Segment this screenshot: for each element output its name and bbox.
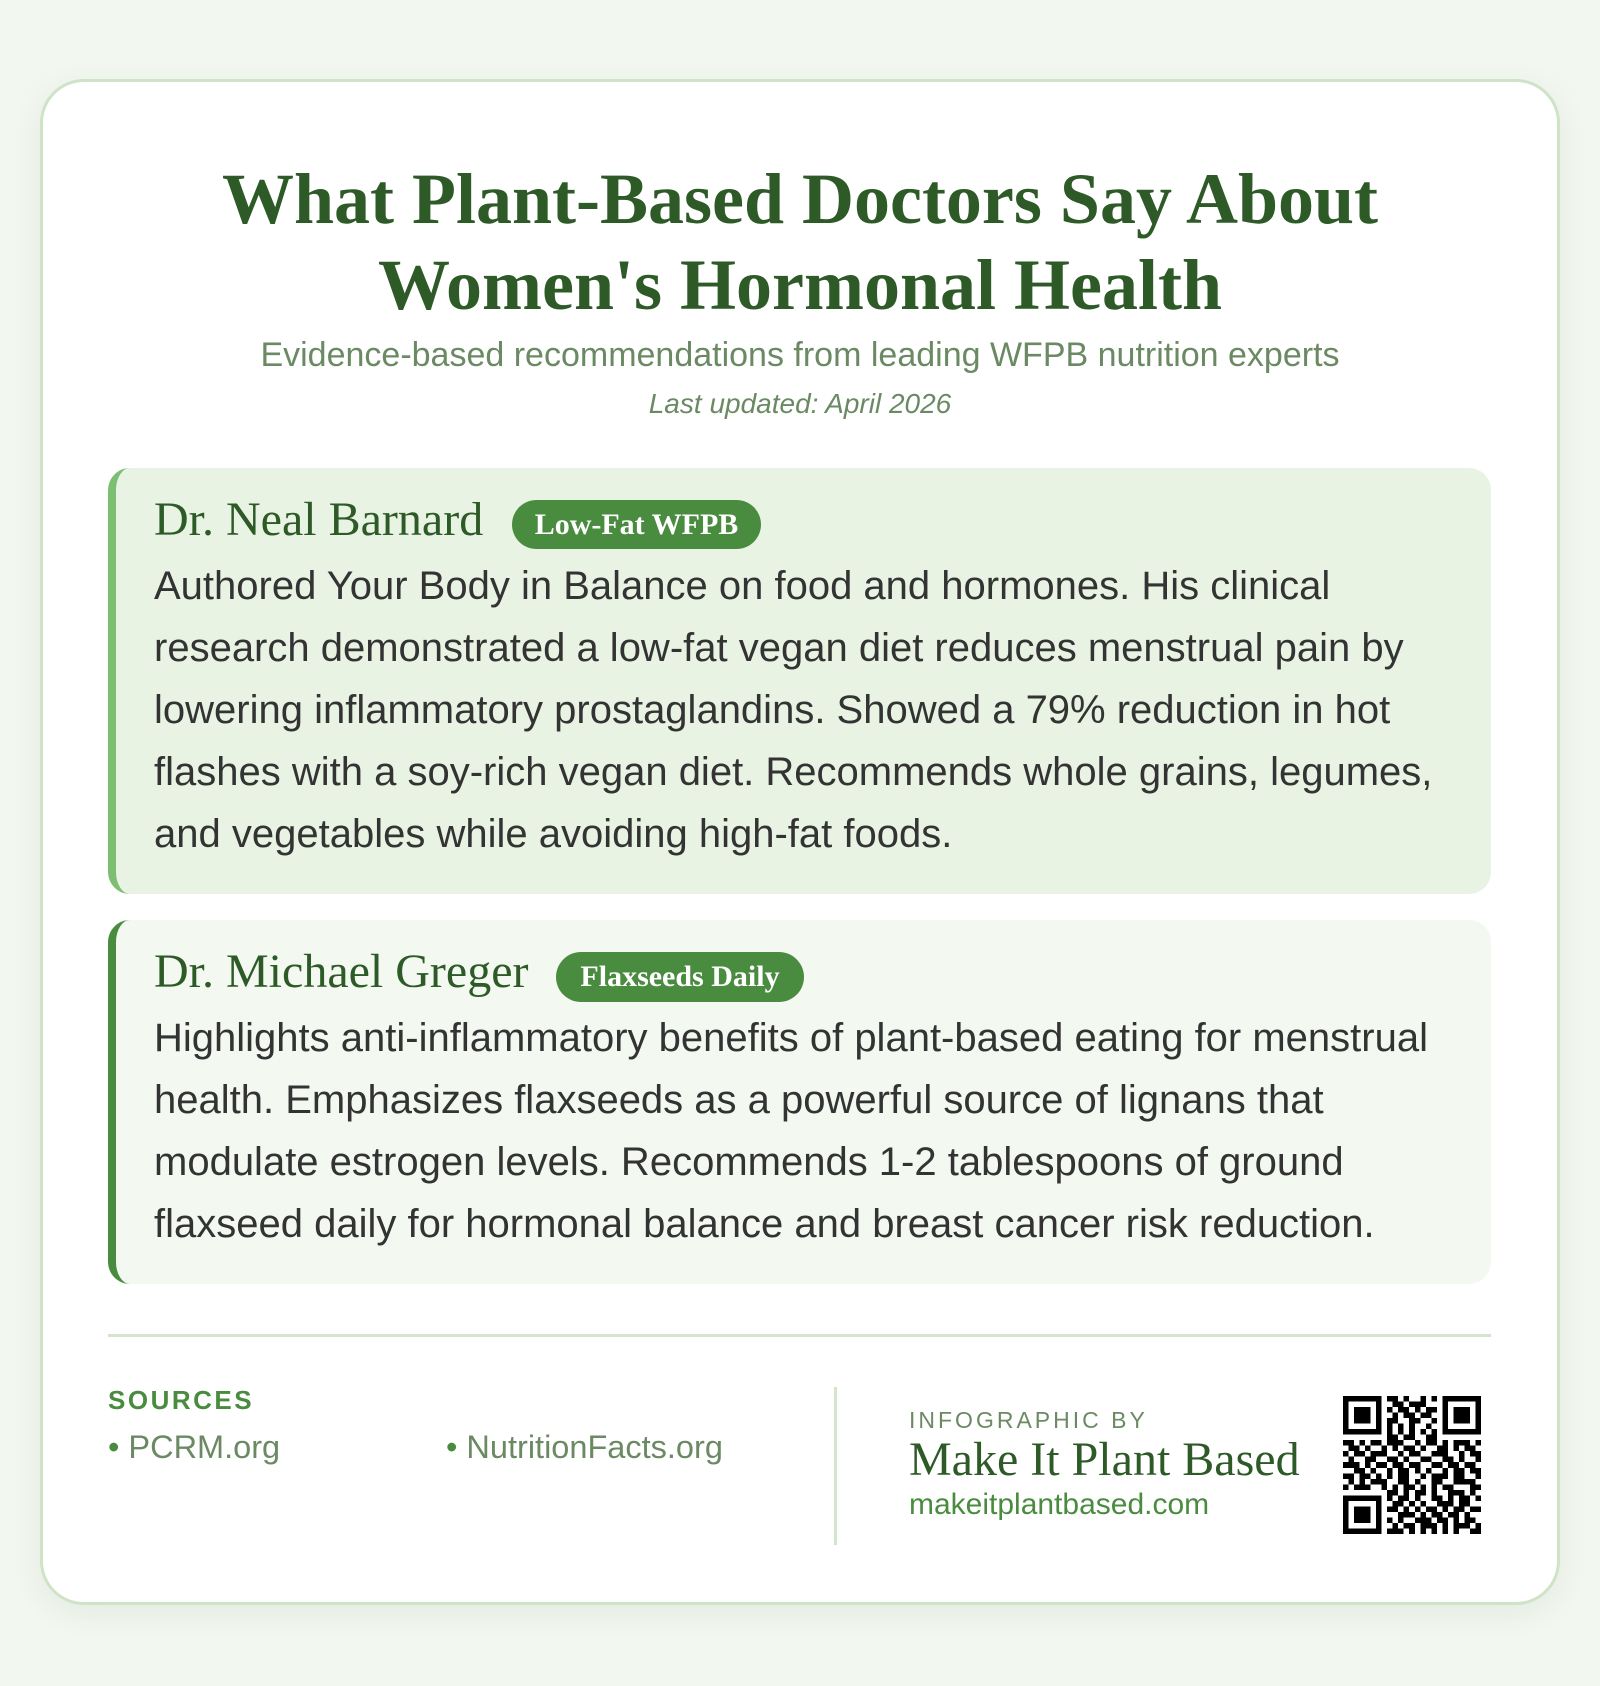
description: health. Emphasizes flaxseeds as a powerful source of lignans that (154, 1078, 1324, 1122)
description: flashes with a soy-rich vegan diet. Recommends whole grains, legumes, (154, 750, 1432, 794)
description (154, 1016, 1428, 1246)
source: PCRM: • PCRM.org (108, 1429, 280, 1465)
panel: Dr. Michael Greger (108, 920, 1491, 1284)
title: Women's Hormonal Health (378, 245, 1222, 325)
doctor name: Dr. Michael Greger (154, 945, 529, 998)
description: and vegetables while avoiding high-fat foods. (154, 812, 952, 856)
description: Authored Your Body in Balance on food and hormones. His clinical (154, 564, 1330, 608)
infographic by label: INFOGRAPHIC BY (909, 1407, 1148, 1433)
badge: Flaxseeds Daily (556, 952, 804, 1002)
source: NutritionFacts: • NutritionFacts.org (446, 1429, 723, 1465)
sources heading: SOURCES (108, 1385, 254, 1415)
QR code (1343, 1396, 1481, 1534)
title: What Plant-Based Doctors Say About (222, 159, 1378, 239)
badge: Flaxseeds Daily: Flaxseeds Daily (580, 960, 780, 993)
panel: Dr. Neal Barnard (108, 468, 1491, 894)
title (222, 159, 1378, 325)
credit block (909, 1407, 1300, 1521)
description: flaxseed daily for hormonal balance and breast cancer risk reduction. (154, 1202, 1375, 1246)
badge: Low-Fat WFPB (512, 500, 761, 549)
sources block (108, 1385, 723, 1465)
brand name: Make It Plant Based (909, 1433, 1300, 1486)
description: modulate estrogen levels. Recommends 1-2 tablespoons of ground (154, 1140, 1344, 1184)
website: makeitplantbased.com (909, 1488, 1209, 1521)
description: research demonstrated a low-fat vegan diet reduces menstrual pain by (154, 626, 1404, 670)
subtitle: Evidence-based recommendations from leading WFPB nutrition experts (260, 336, 1340, 374)
badge: Low-Fat WFPB: Low-Fat WFPB (535, 508, 738, 541)
last updated: Last updated: April 2026 (649, 388, 951, 419)
description (154, 564, 1432, 856)
doctor name: Dr. Neal Barnard (154, 493, 483, 546)
description: lowering inflammatory prostaglandins. Showed a 79% reduction in hot (154, 688, 1390, 732)
description: Highlights anti-inflammatory benefits of plant-based eating for menstrual (154, 1016, 1428, 1060)
